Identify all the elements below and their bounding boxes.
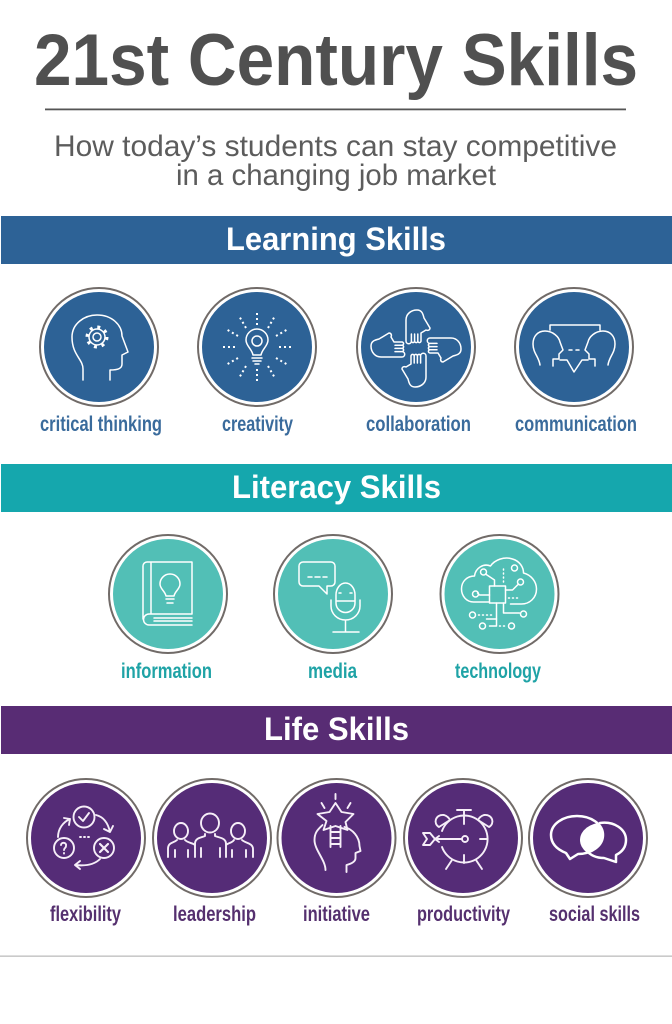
label: leadership [173,903,256,926]
subtitle: How today’s students can stay competitive [54,130,617,163]
icon: four hands [371,310,461,387]
label: collaboration [366,413,471,436]
panel: literacy skills [1,464,672,683]
label: technology [455,660,541,683]
icon: overlapping speech bubbles [551,816,626,862]
panel: learning skills [1,216,672,436]
label: productivity [417,903,510,926]
skill: creativity [198,288,316,436]
skill: leadership [153,779,271,926]
subtitle [54,130,617,192]
label: information [121,660,212,683]
label: social skills [549,903,640,926]
label: initiative [303,903,370,926]
skill: technology [440,535,558,683]
label: media [308,660,357,683]
skill: critical thinking [40,288,162,436]
skill: media [274,535,392,683]
title: 21st Century Skills [34,20,638,101]
icon: two heads talking [533,325,615,372]
label: creativity [222,413,293,436]
icon: decision cycle [54,806,114,869]
heading: learning skills [1,216,672,264]
icon: three people [168,814,253,857]
label: flexibility [50,903,121,926]
icon: cloud circuit [462,558,536,629]
icon: speech bubble and microphone [299,562,360,632]
skill: communication [515,288,637,436]
icon: book with bulb [143,562,192,625]
subtitle: in a changing job market [176,159,497,192]
label: critical thinking [40,413,162,436]
icon: light bulb with rays [220,310,294,384]
panel: life skills [1,706,672,926]
heading: literacy skills: Literacy Skills [232,469,441,505]
icon: head with gear [72,315,128,380]
heading: learning skills: Learning Skills [226,221,446,257]
icon: alarm clock with arrow [423,810,492,869]
skill: social skills [529,779,647,926]
label: communication [515,413,637,436]
skill: flexibility [27,779,145,926]
skill: productivity [404,779,522,926]
skill: collaboration [357,288,475,436]
skill: initiative [278,779,396,926]
heading: literacy skills [1,464,672,512]
icon: head with star and ladder [314,794,360,872]
heading: life skills [1,706,672,754]
heading: life skills: Life Skills [264,711,409,747]
skill: information [109,535,227,683]
